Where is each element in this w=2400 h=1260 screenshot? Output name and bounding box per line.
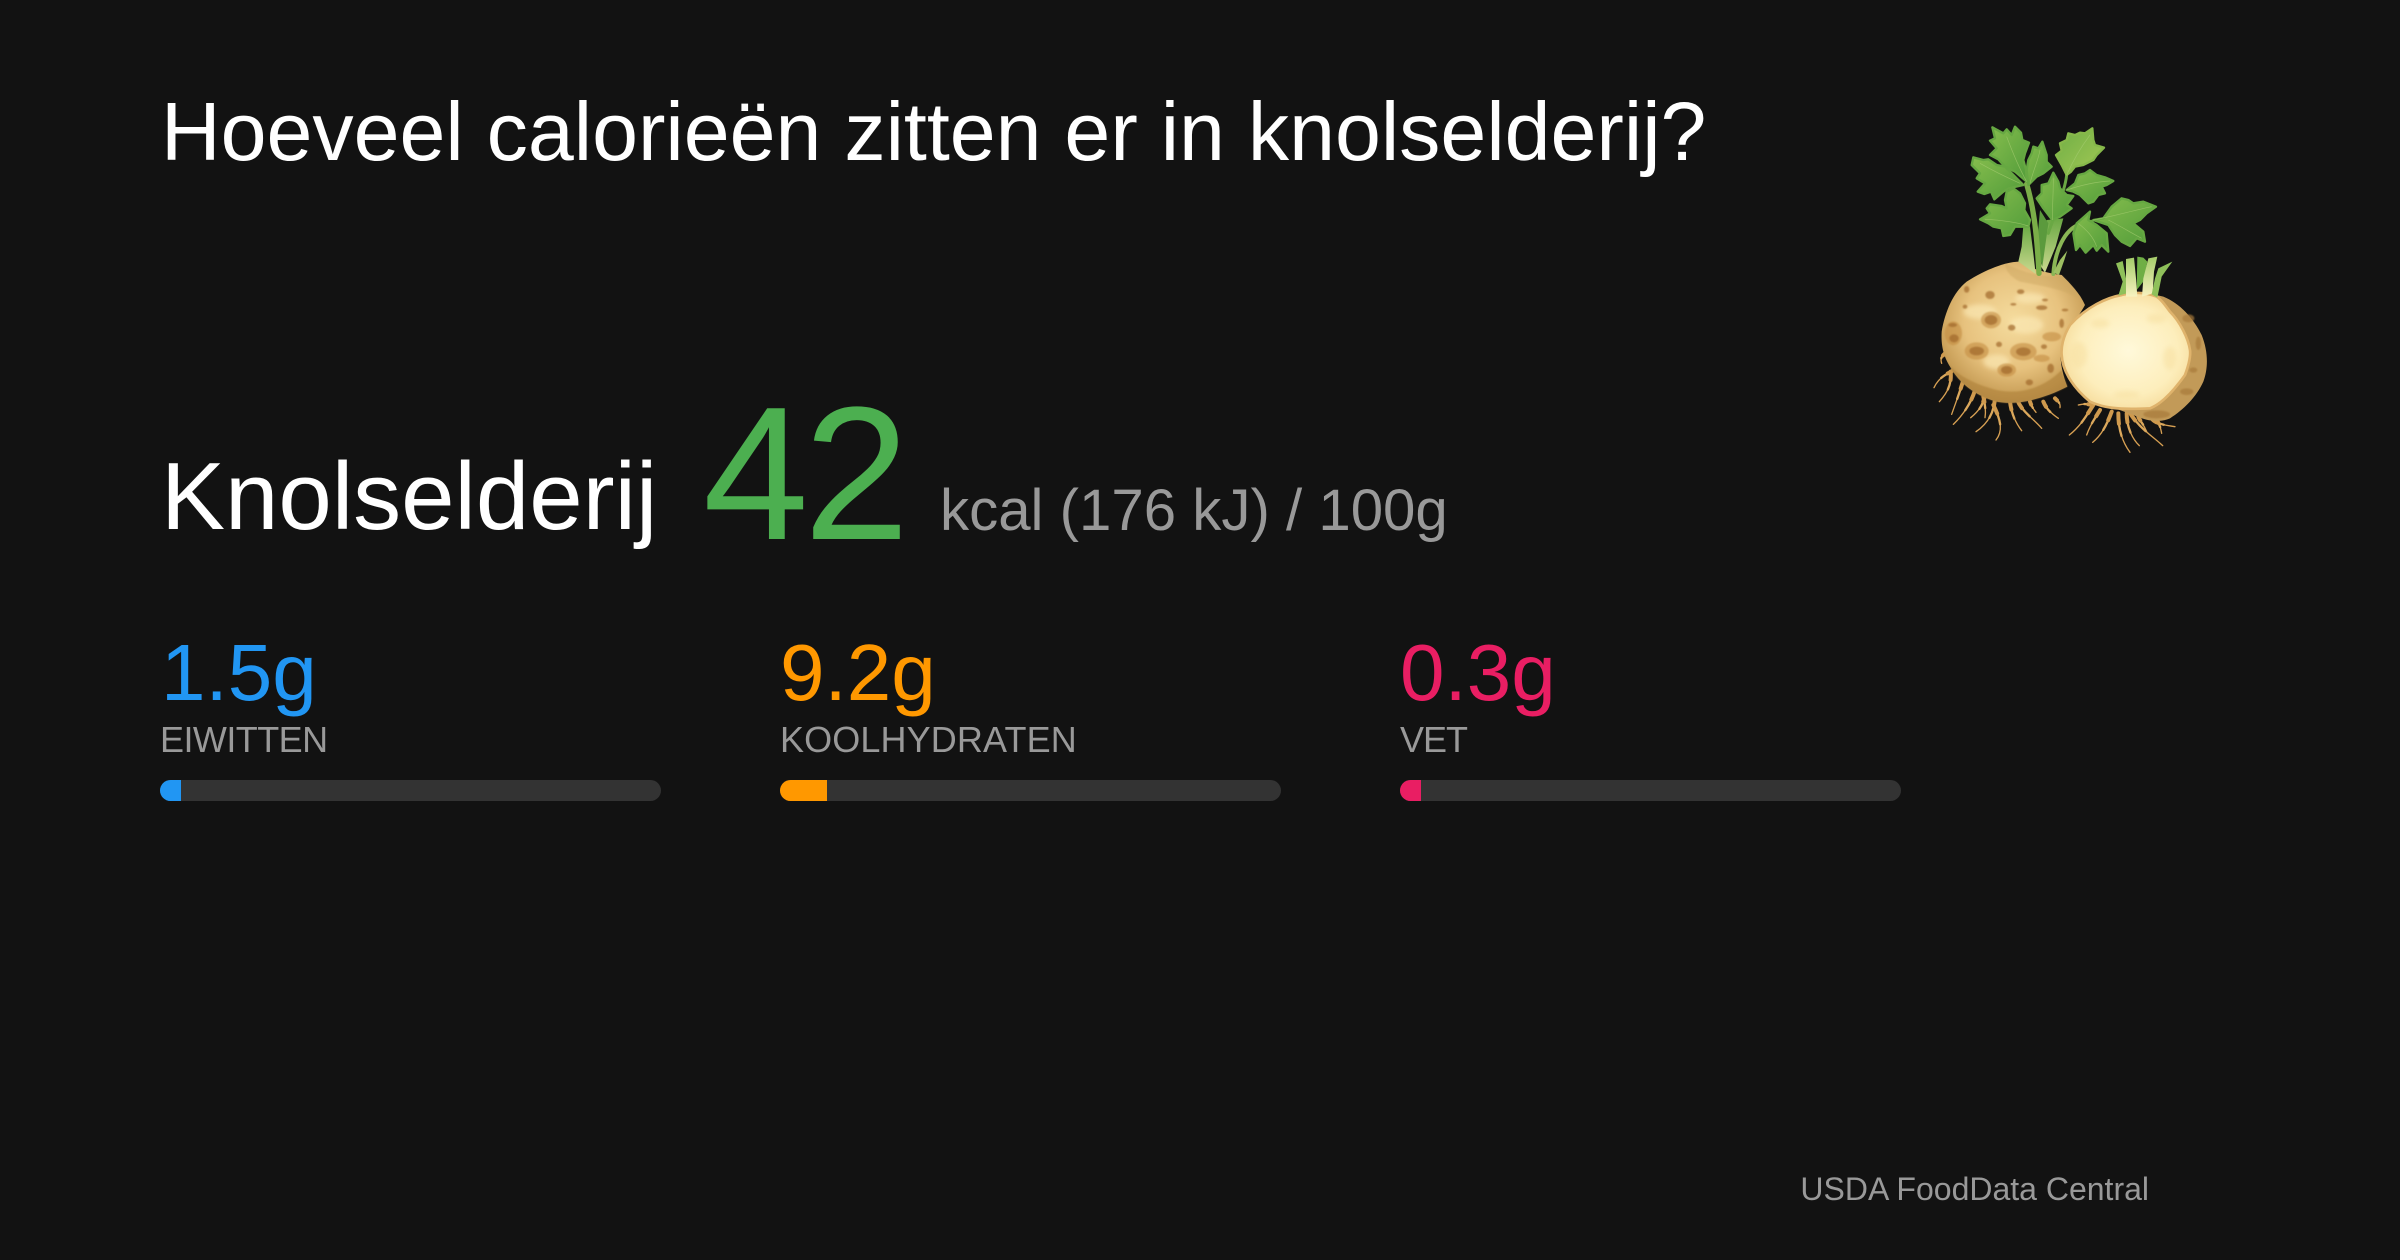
food name: Knolselderij	[161, 443, 657, 550]
panel: carbohydrates	[780, 628, 1281, 801]
title: Hoeveel calorieën zitten er in knolselderij?	[161, 86, 1706, 178]
protein bar	[160, 780, 661, 801]
calorie unit: kcal (176 kJ) / 100g	[940, 478, 1448, 543]
halved celeriac root	[2062, 257, 2207, 452]
carbohydrates value: 9.2g	[780, 628, 936, 717]
whole celeriac root	[1934, 262, 2085, 440]
source credit: USDA FoodData Central	[1800, 1171, 2149, 1207]
icon: celeriac illustration	[1933, 126, 2207, 453]
fat bar	[1400, 780, 1901, 801]
carbohydrates label: KOOLHYDRATEN	[780, 719, 1077, 760]
leaves	[1972, 127, 2156, 275]
panel: protein	[160, 628, 661, 801]
fat label: VET	[1400, 719, 1467, 760]
fat value: 0.3g	[1400, 628, 1556, 717]
panel: fat	[1400, 628, 1901, 801]
protein value: 1.5g	[161, 628, 317, 717]
calorie number: 42	[703, 368, 904, 580]
carbohydrates bar	[780, 780, 1281, 801]
protein label: EIWITTEN	[160, 719, 328, 760]
